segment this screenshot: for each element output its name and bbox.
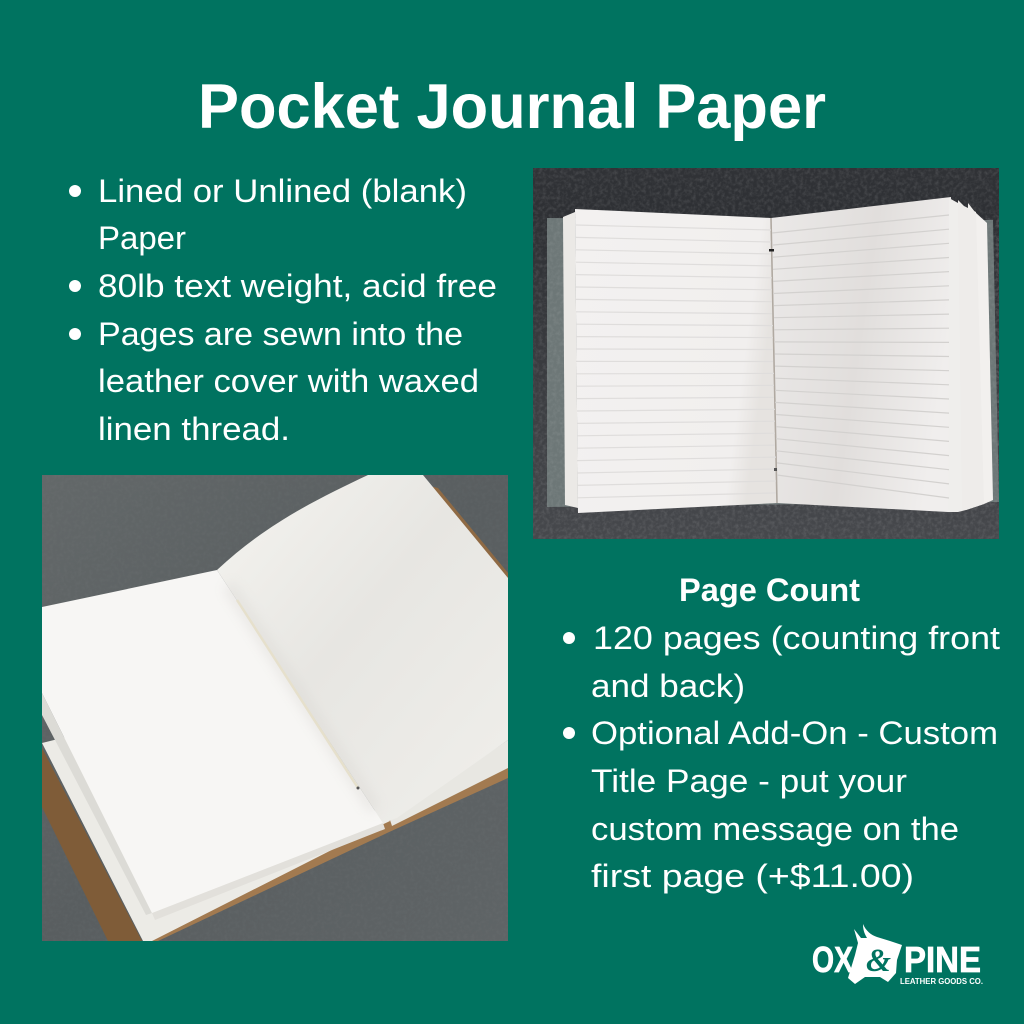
ampersand: & [866,943,891,979]
photo: open blank journal [42,475,508,941]
bullet: sewn pages: Pages are sewn into the [98,316,463,352]
bullet: optional add-on: first page (+$11.00) [591,858,914,894]
bullet: sewn pages [69,316,479,447]
bullet: paper weight: 80lb text weight, acid free [98,268,497,304]
bullet: sewn pages: leather cover with waxed [98,363,479,399]
leather cover [42,486,508,941]
bullet: optional add-on: custom message on the [591,811,959,847]
bullet: 120 pages: 120 pages (counting front [593,620,1000,656]
text block: paper features [69,173,497,447]
logo: Ox & Pine [812,924,983,986]
photo: open lined journal [533,168,999,539]
text block: page count [563,572,1000,894]
wordmark: OX: OX [812,939,853,980]
bullet: lined or unlined [69,173,467,256]
bullet: lined or unlined: Paper [98,220,186,256]
heading: page count: Page Count [679,572,860,608]
bullet: optional add-on: Title Page - put your [591,763,907,799]
bullet: 120 pages: and back) [591,668,745,704]
icon: ox head [848,924,902,984]
bullet: lined or unlined: Lined or Unlined (blank) [98,173,467,209]
bullet: optional add-on [563,715,998,894]
tagline: LEATHER GOODS CO. [900,977,983,986]
wordmark: PINE: PINE [904,939,981,980]
bullet: optional add-on: Optional Add-On - Custom [591,715,998,751]
title: Pocket Journal Paper [198,72,826,142]
bullet: sewn pages: linen thread. [98,411,290,447]
bullet: 120 pages [563,620,1000,704]
